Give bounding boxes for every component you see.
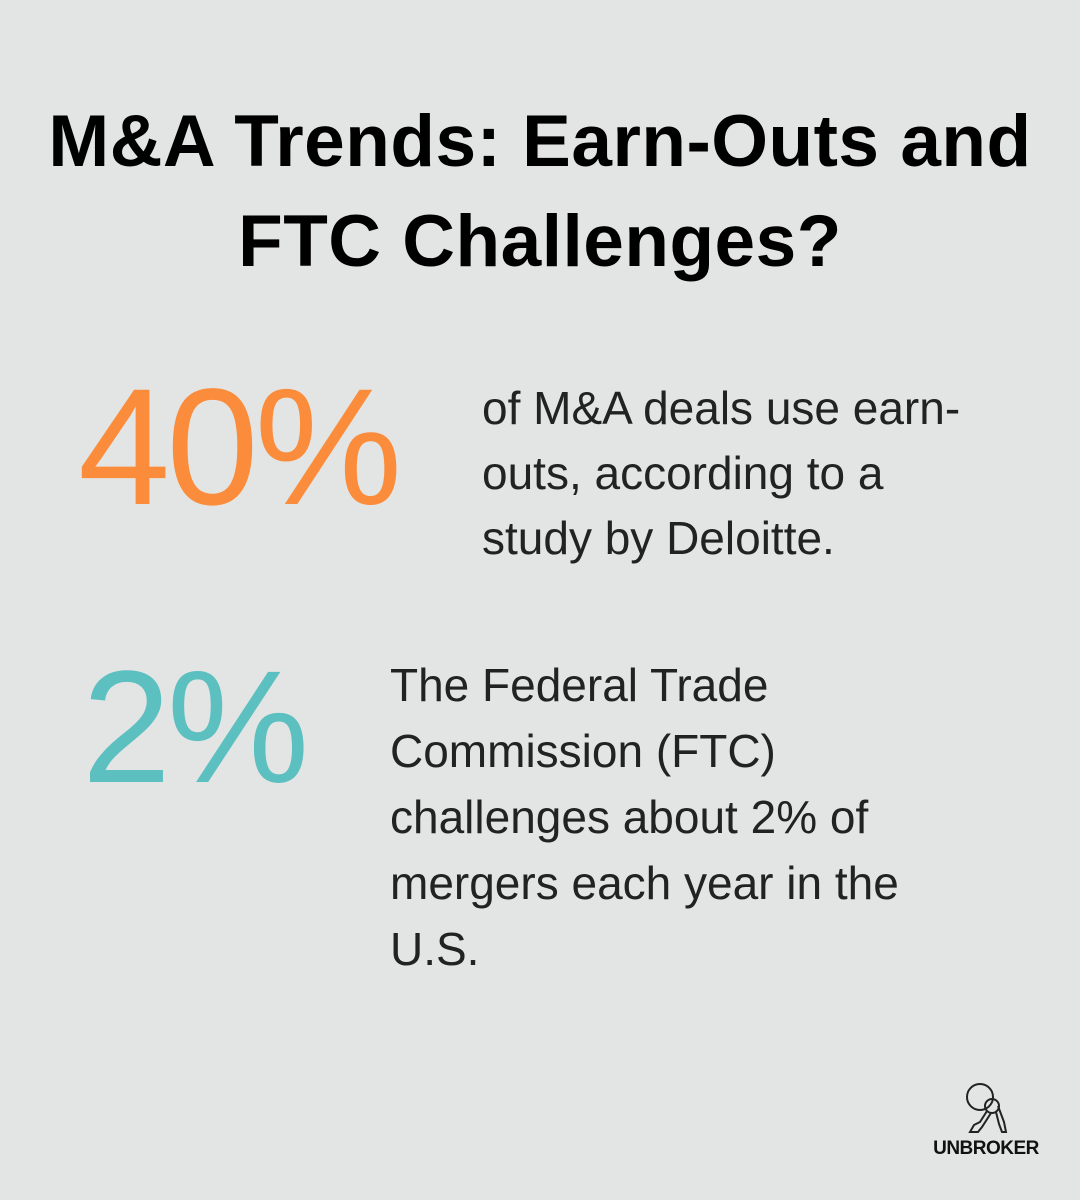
text: 40% description: study by Deloitte. bbox=[482, 512, 835, 564]
title bbox=[48, 101, 1032, 282]
text: 2% description bbox=[390, 659, 899, 975]
stat: 40%: 40% bbox=[78, 355, 398, 540]
text: 2% description: U.S. bbox=[390, 923, 479, 975]
text: 40% description: of M&A deals use earn- bbox=[482, 382, 960, 434]
logo: unbroker bbox=[933, 1083, 1039, 1159]
text: 40% description bbox=[482, 382, 960, 564]
title: FTC Challenges? bbox=[238, 201, 842, 282]
stat: 2%: 2% bbox=[82, 637, 305, 816]
text: 2% description: challenges about 2% of bbox=[390, 791, 868, 843]
text: 2% description: Commission (FTC) bbox=[390, 725, 776, 777]
logo text: UNBROKER bbox=[933, 1138, 1039, 1159]
title: M&A Trends: Earn-Outs and bbox=[48, 101, 1032, 182]
text: 2% description: mergers each year in the bbox=[390, 857, 899, 909]
icon: keys bbox=[966, 1083, 1008, 1133]
text: 40% description: outs, according to a bbox=[482, 447, 883, 499]
text: 2% description: The Federal Trade bbox=[390, 659, 768, 711]
